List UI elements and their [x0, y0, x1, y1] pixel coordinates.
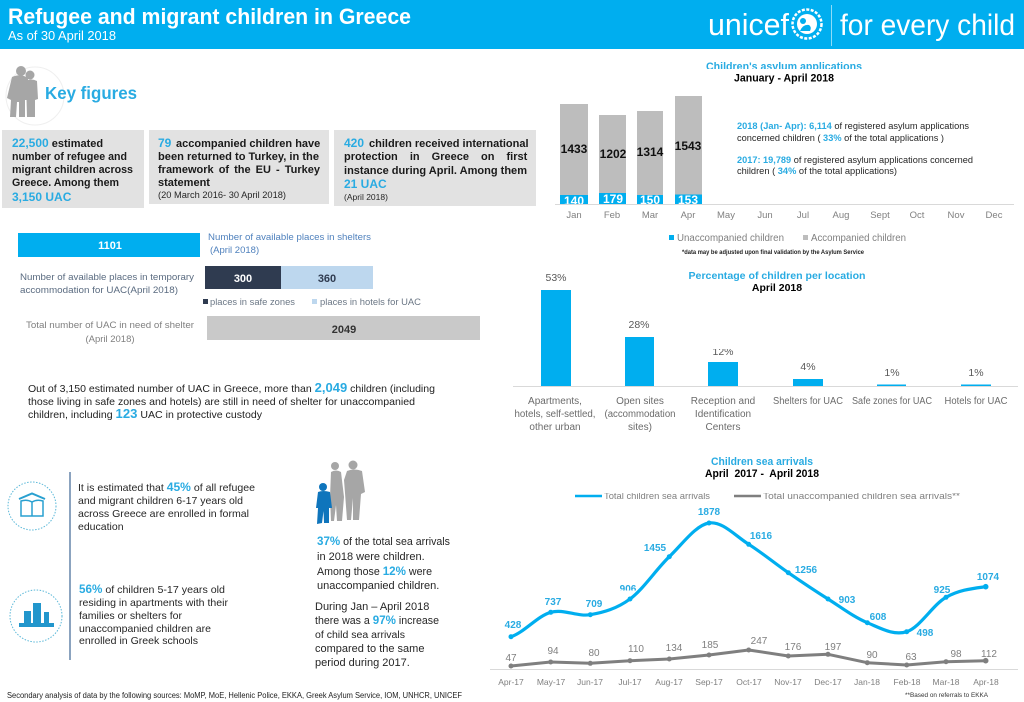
key figure box: 22,500 children: 22,500 estimated: [12, 136, 103, 150]
asylum applications note: [737, 121, 973, 176]
month axis labels: Apr: [681, 210, 695, 221]
UAC shelter paragraph: those living in safe zones and hotels) are still in need of shelter for unaccompanied: [28, 396, 415, 408]
month axis labels: Jul-17: [618, 677, 642, 687]
chart title: Children's asylum applications: [706, 61, 862, 73]
month axis labels: Sep-17: [695, 677, 723, 687]
bar: available places in shelters: (April 2018): [210, 245, 259, 256]
stacked bars: 179: [603, 192, 623, 206]
category labels: Open sites: [616, 396, 664, 407]
month axis labels: [498, 677, 999, 687]
text: 56% enrolled: unaccompanied children are: [79, 623, 211, 635]
key figure box: 22,500 children: migrant children across: [12, 164, 133, 176]
text: 56% enrolled: residing in apartments with their: [79, 597, 228, 609]
bar: temporary accommodation: Number of available places in temporary: [20, 272, 194, 283]
text: 37% of arrivals: 37% of the total sea arrivals: [317, 534, 450, 548]
bar: available places in shelters: [18, 232, 371, 257]
month axis labels: Mar-18: [933, 677, 960, 687]
asylum applications note: concerned children ( 33% of the total applications ): [737, 133, 944, 143]
line: unaccompanied children: 98: [950, 649, 962, 660]
stacked bars: 140: [564, 194, 584, 208]
month axis labels: May: [717, 210, 735, 221]
key figure box: 420 protection: (April 2018): [344, 192, 388, 202]
bar: temporary accommodation: places in hotels for UAC: [320, 297, 421, 308]
subtitle: As of 30 April 2018: [8, 28, 116, 43]
text: 56% enrolled: 56% of children 5-17 years old: [79, 584, 225, 596]
text: 45% enrolled: It is estimated that 45% of all refugee: [78, 480, 255, 494]
text: 97% increase: [315, 601, 439, 669]
line: unaccompanied children: 134: [666, 643, 683, 654]
bars: [541, 290, 991, 386]
text: 37% of arrivals: [317, 534, 450, 592]
line: total children: [505, 507, 1000, 639]
legend: [669, 233, 906, 244]
key figure box: 79 returned: 79: [158, 136, 172, 150]
chart title: [705, 456, 819, 480]
month axis labels: Nov-17: [774, 677, 802, 687]
month axis labels: Apr-18: [973, 677, 999, 687]
key figure box: 420 protection: instance during April. Among them: [344, 165, 527, 177]
month axis labels: Jul: [797, 210, 809, 221]
text: 37% of arrivals: Among those 12% were: [317, 564, 432, 578]
category labels: Apartments,: [528, 396, 582, 407]
category labels: Shelters for UAC: [773, 396, 843, 407]
key figure box: 22,500 children: [2, 130, 144, 208]
category labels: Hotels for UAC: [944, 396, 1008, 407]
asylum applications note: 2017: 19,789 of registered asylum applications concerned: [737, 155, 973, 165]
key figure box: 79 returned: been returned to Turkey, in the: [158, 151, 319, 163]
key figure box: 420 protection: children received international: [369, 138, 529, 150]
text: 45% enrolled: across Greece are enrolled in formal: [78, 508, 249, 520]
category labels: Safe zones for UAC: [852, 396, 932, 407]
bar: temporary accommodation: [20, 266, 421, 308]
bar: UAC in need of shelter: Total number of UAC in need of shelter: [26, 320, 194, 331]
month axis labels: Jun: [757, 210, 773, 221]
key figure box: 79 returned: (20 March 2016- 30 April 2018): [158, 190, 286, 200]
chart title: Percentage of children per location: [688, 270, 866, 282]
text: 97% increase: of child sea arrivals: [315, 630, 405, 641]
line: total children: 608: [870, 612, 887, 623]
footnote: **Based on referrals to EKKA: [905, 692, 989, 699]
month axis labels: Sept: [870, 210, 890, 221]
line: unaccompanied children: 197: [825, 642, 842, 653]
month axis labels: Mar: [642, 210, 658, 221]
category labels: [514, 396, 1008, 433]
category labels: sites): [628, 422, 652, 433]
month axis labels: Dec: [986, 210, 1003, 221]
text: 97% increase: there was a 97% increase: [315, 613, 439, 627]
bar: temporary accommodation: 300: [234, 273, 252, 285]
bar: UAC in need of shelter: 2049: [332, 324, 356, 336]
stacked bars: 1202: [600, 147, 627, 161]
value labels: [545, 272, 984, 379]
line: total children: 1878: [698, 507, 721, 518]
sea arrivals note: [315, 460, 450, 669]
bar: available places in shelters: 1101: [98, 240, 122, 252]
category labels: (accommodation: [604, 409, 676, 420]
month axis labels: Oct: [910, 210, 925, 221]
key figures heading with icon: [6, 66, 137, 125]
chart title: [706, 61, 862, 84]
line: total children: 498: [917, 628, 934, 639]
key figure box: 22,500 children: 3,150 UAC: [12, 190, 72, 204]
month axis labels: Jan: [566, 210, 582, 221]
line: unaccompanied children: 90: [866, 650, 878, 661]
asylum applications note: children ( 34% of the total applications): [737, 166, 897, 176]
key figure box: 79 returned: accompanied children have: [176, 138, 320, 150]
line: total children: 906: [620, 584, 637, 595]
category labels: Reception and: [691, 396, 755, 407]
month axis labels: Aug-17: [655, 677, 683, 687]
icon: buildings: [10, 590, 62, 642]
text: 45% enrolled: [78, 480, 255, 533]
UAC shelter paragraph: children, including 123 UAC in protective custody: [28, 406, 263, 421]
header banner: [0, 0, 1024, 49]
unicef logo: unicef: [708, 7, 789, 42]
line: total children: 737: [545, 597, 562, 608]
legend: Accompanied children: [811, 233, 906, 244]
stacked bars: 153: [678, 193, 698, 207]
stacked bars: 1433: [561, 142, 588, 156]
line: total children: 903: [839, 595, 856, 606]
percentage per location chart: [513, 270, 1018, 433]
chart title: Children sea arrivals: [711, 456, 813, 468]
month axis labels: Oct-17: [736, 677, 762, 687]
text: 97% increase: period during 2017.: [315, 657, 410, 669]
line: total children: 1074: [977, 572, 1000, 583]
value labels: 12%: [712, 346, 734, 358]
text: 97% increase: compared to the same: [315, 643, 424, 655]
key figure box: 79 returned: [149, 130, 329, 204]
line: unaccompanied children: 185: [702, 640, 719, 651]
footnote: *data may be adjusted upon final validation by the Asylum Service: [682, 250, 865, 256]
key figures heading with icon: Key figures: [45, 83, 137, 103]
text: 45% enrolled: and migrant children 6-17 years old: [78, 495, 243, 507]
chart title: April 2018: [752, 282, 802, 294]
shelter capacity bars: [18, 232, 480, 345]
line: unaccompanied children: 110: [628, 644, 644, 655]
month axis labels: May-17: [537, 677, 565, 687]
category labels: Centers: [705, 422, 741, 433]
key figure box: 22,500 children: number of refugee and: [12, 151, 127, 163]
unicef logo: for every child: [840, 9, 1015, 42]
stacked bars: [560, 96, 702, 208]
line: total children: 925: [934, 585, 951, 596]
stacked bars: 1314: [637, 145, 664, 159]
month axis labels: Nov: [948, 210, 965, 221]
line: total children: 709: [586, 599, 603, 610]
stacked bars: 1543: [675, 139, 702, 153]
line: total children: 1455: [644, 543, 667, 554]
stacked bars: 150: [640, 193, 660, 207]
month axis labels: Feb: [604, 210, 620, 221]
line: total children: 428: [505, 620, 522, 631]
line: total children: 1256: [795, 565, 818, 576]
title: Refugee and migrant children in Greece: [8, 4, 411, 29]
line: total children: 1616: [750, 531, 773, 542]
month axis labels: [566, 210, 1003, 221]
text: 37% of arrivals: in 2018 were children.: [317, 551, 425, 563]
month axis labels: Apr-17: [498, 677, 524, 687]
asylum applications chart: [555, 61, 1014, 256]
line: unaccompanied children: 80: [588, 648, 600, 659]
month axis labels: Aug: [833, 210, 849, 221]
line: unaccompanied children: 47: [505, 653, 517, 664]
key figure box: 420 protection: [334, 130, 536, 206]
text: 97% increase: During Jan – April 2018: [315, 601, 429, 613]
bar: available places in shelters: Number of available places in shelters: [208, 232, 371, 243]
icon: book: [8, 482, 56, 530]
education panel: [8, 472, 255, 660]
asylum applications note: 2018 (Jan- Apr): 6,114 of registered asylum applications: [737, 121, 970, 131]
unicef logo: [708, 5, 1015, 46]
month axis labels: Jun-17: [577, 677, 603, 687]
category labels: other urban: [529, 422, 581, 433]
line: unaccompanied children: 176: [785, 642, 802, 653]
chart title: April 2017 - April 2018: [705, 468, 819, 480]
bar: temporary accommodation: places in safe zones: [210, 297, 295, 308]
UAC shelter paragraph: Out of 3,150 estimated number of UAC in Greece, more than 2,049 children (including: [28, 380, 435, 395]
value labels: 1%: [884, 367, 900, 379]
month axis labels: Feb-18: [894, 677, 921, 687]
key figure box: 420 protection: protection in Greece on first: [344, 151, 528, 163]
value labels: 1%: [968, 367, 984, 379]
bar: temporary accommodation: accommodation for UAC(April 2018): [20, 285, 178, 296]
chart title: January - April 2018: [734, 72, 834, 84]
value labels: 4%: [800, 361, 816, 373]
legend: Unaccompanied children: [677, 233, 784, 244]
key figure box: 79 returned: statement: [158, 177, 210, 189]
legend: Total children sea arrivals: [604, 491, 710, 502]
key figure box: 420 protection: 21 UAC: [344, 177, 387, 191]
text: 37% of arrivals: unaccompanied children.: [317, 580, 439, 592]
month axis labels: Dec-17: [814, 677, 842, 687]
key figure box: 22,500 children: Greece. Among them: [12, 177, 119, 189]
icon: family: [316, 460, 365, 524]
line: unaccompanied children: 63: [905, 652, 917, 663]
chart title: [688, 270, 866, 294]
value labels: 53%: [545, 272, 567, 284]
text: 56% enrolled: [79, 584, 228, 647]
bar: UAC in need of shelter: [26, 316, 480, 345]
value labels: 28%: [628, 319, 650, 331]
month axis labels: Jan-18: [854, 677, 880, 687]
text: 45% enrolled: education: [78, 521, 124, 533]
line: unaccompanied children: 94: [547, 646, 559, 657]
UAC shelter paragraph: [28, 380, 435, 421]
legend: Total unaccompanied children sea arrivals**: [763, 491, 960, 502]
key figure box: 420 protection: 420: [344, 136, 364, 150]
category labels: Identification: [695, 409, 751, 420]
key figure box: 79 returned: framework of the EU - Turkey: [158, 164, 321, 176]
line: unaccompanied children: [505, 636, 997, 668]
text: 56% enrolled: enrolled in Greek schools: [79, 635, 198, 647]
sources footer: Secondary analysis of data by the following sources: MoMP, MoE, Hellenic Police, EKKA, Greek Asylum Service, IOM, UNHCR, UNICEF: [7, 691, 462, 700]
legend: [575, 493, 960, 501]
bar: UAC in need of shelter: (April 2018): [85, 334, 135, 345]
bar: temporary accommodation: 360: [318, 273, 336, 285]
sea arrivals line chart: [490, 456, 1018, 699]
line: unaccompanied children: 112: [981, 649, 997, 660]
text: 56% enrolled: families or shelters for: [79, 610, 182, 622]
category labels: hotels, self-settled,: [514, 409, 596, 420]
line: unaccompanied children: 247: [751, 636, 768, 647]
